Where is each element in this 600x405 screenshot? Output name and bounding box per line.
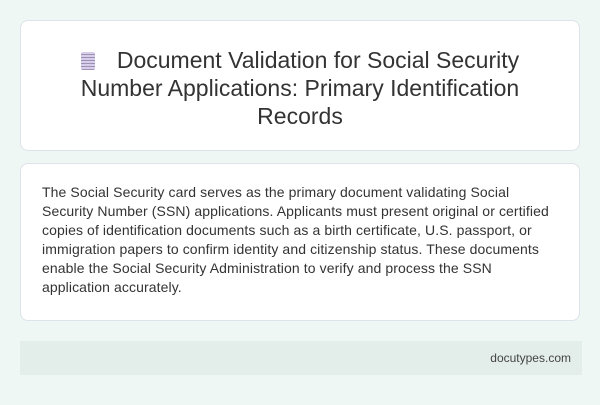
footer [20, 341, 582, 375]
panel: description card [20, 163, 580, 321]
text block: description: Security Number (SSN) applications. Applicants must present original or certified [42, 203, 549, 219]
text block: description: immigration papers to confirm identity and citizenship status. These documents [42, 241, 539, 257]
icon: document [81, 52, 95, 70]
text block: description: application accurately. [42, 279, 182, 295]
text block: description: copies of identification documents such as a birth certificate, U.S. passport, or [42, 222, 532, 238]
text block: description: The Social Security card serves as the primary document validating Social [42, 184, 509, 200]
title: Document Validation for Social Security Number Applications: Primary Identification Records [81, 47, 519, 129]
footer text: docutypes.com [490, 351, 571, 365]
panel: title card [20, 20, 580, 151]
text block: description [42, 184, 549, 295]
text block: description: enable the Social Security Administration to verify and process the SSN [42, 260, 492, 276]
